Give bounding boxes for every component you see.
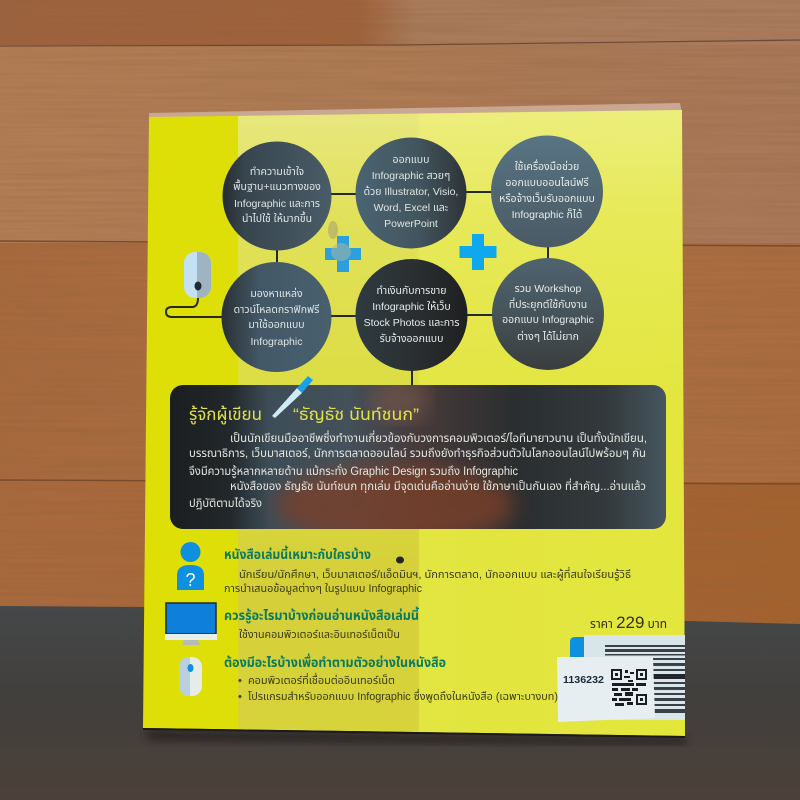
circle: graphic sources: มองหาแหล่ง	[250, 287, 303, 300]
section: what you need: โปรแกรมสำหรับออกแบบ Infographic ซึ่งพูดถึงในหนังสือ (เฉพาะบางบท)	[248, 688, 558, 703]
section: prerequisites: ใช้งานคอมพิวเตอร์และอินเทอร์เน็ตเป็น	[239, 628, 400, 641]
icon: mouse on cable	[184, 252, 211, 298]
circle: design tools: ออกแบบ	[393, 154, 429, 166]
circle: workshop: ออกแบบ Infographic	[502, 314, 594, 326]
section: who this book is for: การนำเสนอข้อมูลต่างๆ ในรูปแบบ Infographic	[224, 582, 422, 595]
circle: workshop: ต่างๆ ได้ไม่ยาก	[517, 330, 579, 343]
section: what you need	[224, 653, 558, 703]
wood background	[0, 0, 800, 630]
circle: workshop: รวม Workshop	[515, 283, 582, 295]
section: who this book is for	[224, 545, 631, 595]
price: ราคา 229 บาท	[590, 613, 667, 632]
circle: online tools: Infographic ก็ได้	[512, 208, 582, 221]
circle: design tools: Word, Excel และ	[374, 202, 449, 214]
icon: monitor	[165, 603, 217, 645]
circle: understand basics	[222, 142, 332, 250]
author biography	[189, 430, 647, 510]
circle: graphic sources: ดาวน์โหลดกราฟิกฟรี	[234, 304, 320, 316]
section: what you need: •	[238, 691, 242, 703]
icon: mouse	[179, 657, 202, 696]
icon: plus right	[460, 234, 496, 270]
book cover	[143, 103, 685, 738]
heading: author	[189, 406, 419, 424]
heading: author: รู้จักผู้เขียน	[189, 406, 262, 424]
circle: graphic sources	[222, 262, 332, 372]
panel: about the author	[170, 385, 666, 529]
circle: online tools	[491, 136, 603, 248]
author biography: ปฏิบัติตามได้จริง	[189, 496, 262, 510]
circle: online tools: หรือจ้างเว็บรับออกแบบ	[499, 192, 595, 205]
icon: dark speck	[396, 556, 404, 564]
author biography: จึงมีความรู้หลากหลายด้าน แม้กระทั่ง Graphic Design รวมถึง Infographic	[189, 464, 518, 478]
book shadow	[143, 730, 686, 745]
section: what you need: คอมพิวเตอร์ที่เชื่อมต่ออินเทอร์เน็ต	[248, 672, 395, 687]
circle: earn money: ทำเงินกับการขาย	[377, 285, 446, 297]
heading: author: “ธัญธัช นันท์ชนก”	[293, 406, 419, 424]
circle: understand basics: นำไปใช้ ให้มากขึ้น	[242, 211, 312, 225]
circle: design tools: PowerPoint	[384, 218, 438, 230]
circle: graphic sources: มาใช้ออกแบบ	[248, 319, 305, 331]
library sticker with QR code: 1136232	[563, 675, 604, 686]
dark table surface	[0, 606, 800, 800]
section: who this book is for: นักเรียน/นักศึกษา, เว็บมาสเตอร์/แอ็ดมินฯ, นักการตลาด, นักออกแบบ และผู้ที่สนใจเรียนรู้วิธี	[239, 566, 631, 581]
circle: online tools: ใช้เครื่องมือช่วย	[515, 159, 579, 173]
library sticker with QR code	[557, 657, 655, 722]
section: what you need: •	[238, 675, 242, 687]
circle: understand basics: Infographic และการ	[234, 198, 320, 210]
circle: earn money: Infographic ให้เว็บ	[372, 300, 451, 313]
QR code	[611, 669, 647, 706]
icon: person with question mark	[177, 542, 204, 590]
barcode label	[570, 635, 685, 720]
circle: understand basics: ทำความเข้าใจ	[250, 166, 304, 178]
section: prerequisites	[224, 606, 420, 641]
circle: workshop	[492, 258, 604, 370]
circle: design tools: Infographic สวยๆ	[372, 170, 450, 182]
circle: earn money	[356, 259, 468, 371]
author biography: หนังสือของ ธัญธัช นันท์ชนก ทุกเล่ม มีจุดเด่นคืออ่านง่าย ใช้ภาษาเป็นกันเอง ที่สำคัญ...อ่านแล้ว	[230, 478, 646, 493]
circle: earn money: รับจ้างออกแบบ	[380, 333, 443, 345]
circle: design tools: ด้วย Illustrator, Visio,	[364, 186, 458, 198]
icon: person with question mark: ?	[185, 570, 196, 590]
circle: understand basics: พื้นฐาน+แนวทางของ	[233, 179, 321, 193]
circle: earn money: Stock Photos และการ	[364, 317, 459, 329]
connector lines	[166, 192, 548, 386]
section: prerequisites: ควรรู้อะไรมาบ้างก่อนอ่านหนังสือเล่มนี้	[224, 606, 420, 624]
author biography: บรรณาธิการ, เว็บมาสเตอร์, นักการตลาดออนไลน์ รวมถึงยังทำธุรกิจส่วนตัวในโลกออนไลน์ไปพร้อมๆ กัน	[189, 446, 646, 460]
icon: pen	[272, 376, 313, 418]
author biography: เป็นนักเขียนมืออาชีพซึ่งทำงานเกี่ยวข้องกับวงการคอมพิวเตอร์/ไอทีมายาวนาน เป็นทั้งนักเขียน,	[230, 430, 647, 445]
section: what you need: ต้องมีอะไรบ้างเพื่อทำตามตัวอย่างในหนังสือ	[224, 653, 446, 670]
circle: online tools: ออกแบบออนไลน์ฟรี	[505, 177, 589, 189]
circle: workshop: ที่ประยุกต์ใช้กับงาน	[509, 297, 587, 311]
circle: graphic sources: Infographic	[251, 336, 302, 348]
section: who this book is for: หนังสือเล่มนี้เหมาะกับใครบ้าง	[224, 545, 371, 562]
circle: design tools	[356, 138, 466, 248]
icon: plus left	[325, 221, 361, 272]
